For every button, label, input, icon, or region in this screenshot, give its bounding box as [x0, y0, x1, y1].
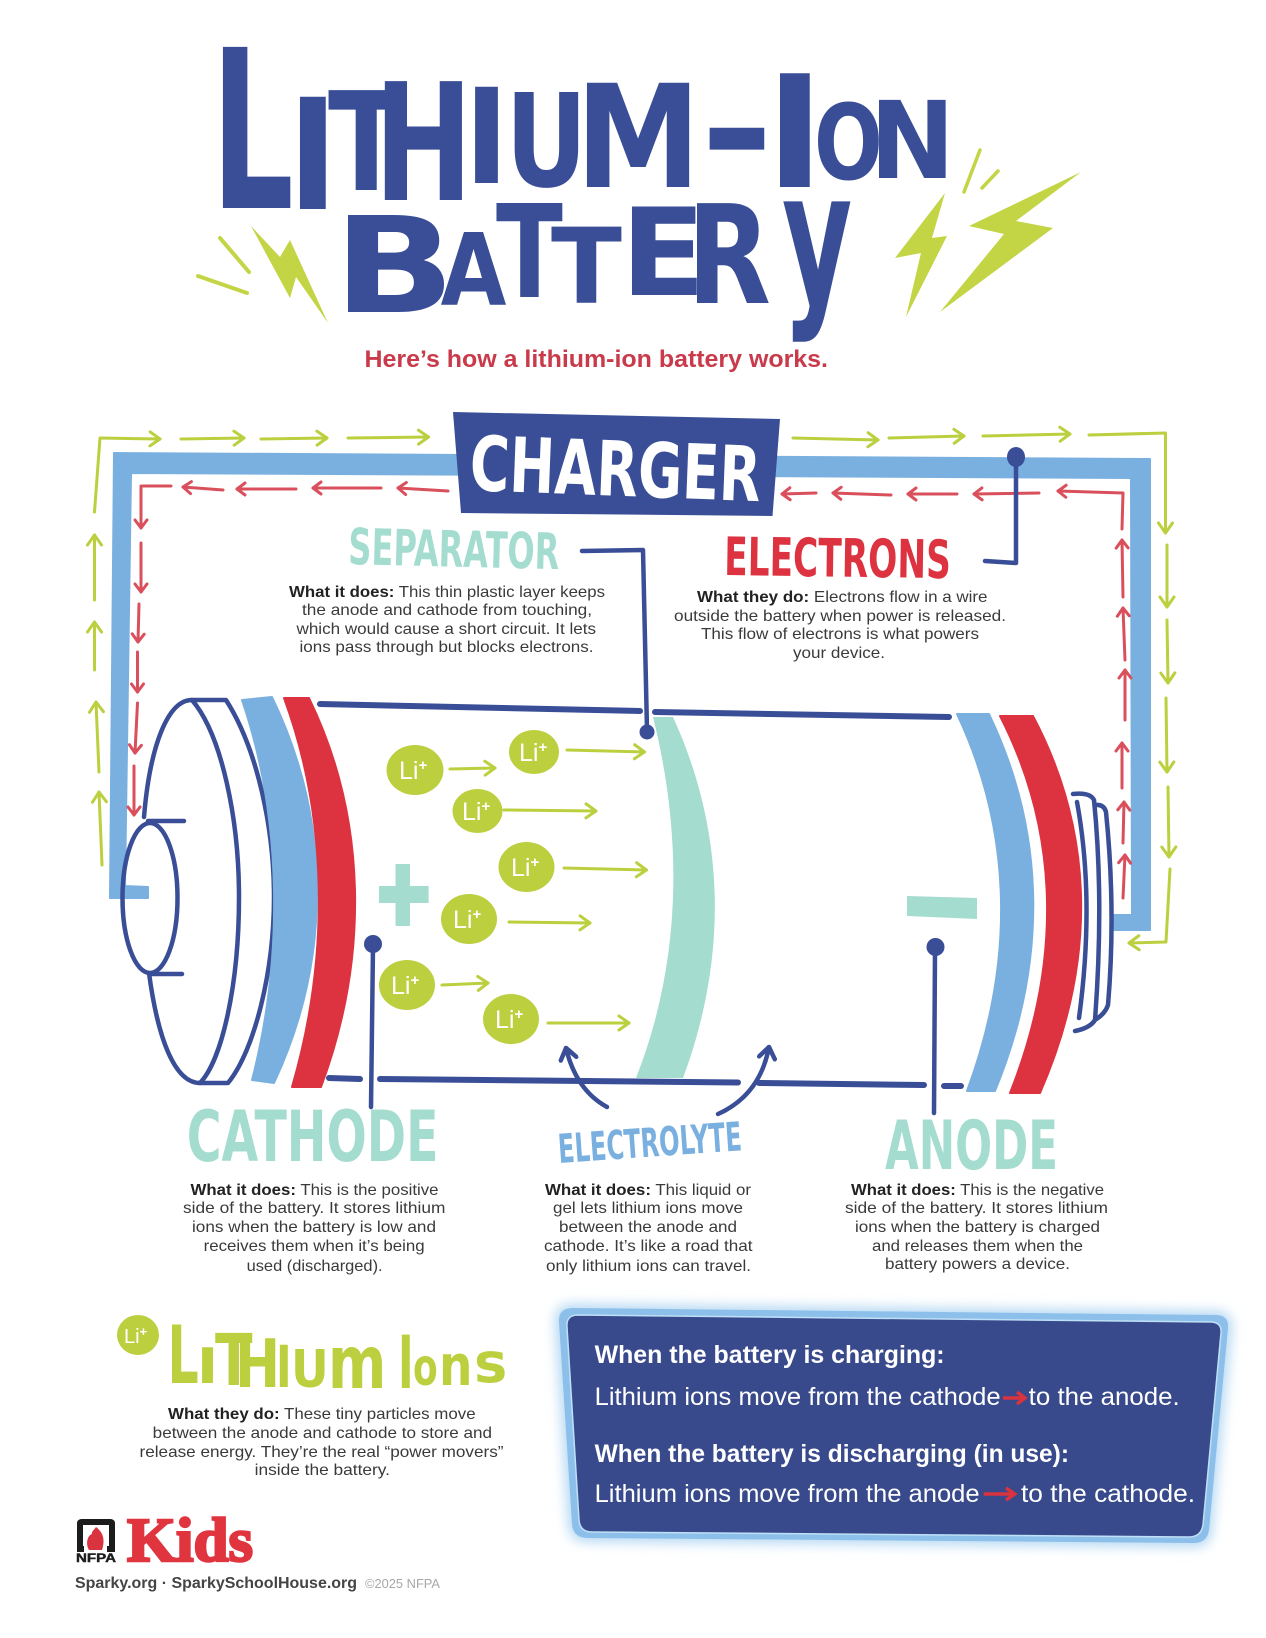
lithium ions: Li — [462, 798, 481, 826]
battery casing lines — [320, 704, 961, 1086]
text: separator: ions pass through but blocks electrons. — [300, 639, 594, 656]
lithium ions: Li — [511, 854, 530, 882]
right blue layer — [957, 714, 1033, 1091]
discharging text: Lithium ions move from the anode — [595, 1480, 980, 1508]
text: cathode: used (discharged). — [247, 1258, 383, 1275]
positive end cap — [122, 700, 274, 1083]
charger box — [453, 412, 780, 519]
heading: lithium ions — [117, 1308, 507, 1406]
text: cathode — [183, 1182, 445, 1275]
text: electrons — [674, 589, 1006, 662]
text: separator: What it does: This thin plastic layer keeps — [289, 584, 605, 601]
lithium ions — [379, 730, 559, 1044]
text: anode: and releases them when the — [872, 1238, 1083, 1255]
heading: lithium ions: + — [140, 1324, 148, 1339]
charging text — [595, 1383, 1180, 1411]
text: lithium ions: release energy. They’re the real “power movers” — [140, 1444, 504, 1461]
charging text: to the anode. — [1029, 1383, 1180, 1411]
text: electrolyte: cathode. It’s like a road that — [544, 1238, 753, 1255]
title: M — [575, 54, 701, 221]
heading: lithium ions: s — [474, 1331, 507, 1396]
logo: NFPA — [76, 1522, 116, 1565]
subtitle: Here’s how a lithium-ion battery works. — [364, 346, 828, 373]
text: cathode: receives them when it’s being — [204, 1238, 425, 1255]
text: anode: What it does: This is the negative — [851, 1182, 1104, 1199]
text: cathode: What it does: This is the positive — [190, 1182, 439, 1199]
panel glow — [555, 1304, 1232, 1547]
heading: lithium ions: I — [276, 1333, 292, 1401]
lithium ions: + — [514, 1006, 523, 1023]
logo: Kids: Kids — [127, 1507, 253, 1575]
right red layer — [1000, 716, 1081, 1093]
heading: electrolyte: ELECTROLYTE — [556, 1114, 743, 1173]
title: O — [814, 82, 883, 204]
text: electrolyte: gel lets lithium ions move — [553, 1200, 743, 1217]
lithium ions: Li — [495, 1006, 514, 1034]
logo: NFPA: NFPA — [76, 1553, 116, 1565]
lithium ions: + — [472, 906, 481, 923]
icon: lightning bolt left — [198, 226, 328, 323]
heading: lithium ions: Li — [124, 1326, 140, 1348]
electrons pointer wire — [985, 447, 1025, 563]
inner red electron arrows — [134, 486, 1125, 898]
heading: lithium ions: I — [398, 1322, 414, 1406]
ion arrows — [442, 750, 646, 1023]
title: I — [464, 60, 509, 214]
title: T — [496, 179, 563, 329]
text: electrons: What they do: Electrons flow in a wire — [697, 589, 988, 606]
title: H — [374, 49, 473, 239]
heading: lithium ions: L — [168, 1308, 199, 1402]
heading: lithium ions: U — [291, 1339, 329, 1400]
text: anode: battery powers a device. — [885, 1256, 1070, 1273]
lithium ions: + — [538, 739, 547, 756]
heading: separator: SEPARATOR — [348, 518, 560, 581]
electrolyte arrows — [566, 1047, 769, 1114]
heading: lithium ions: H — [235, 1326, 280, 1404]
lithium ions: Li — [399, 757, 418, 785]
heading: electrons: ELECTRONS — [724, 527, 951, 591]
lithium ions: + — [418, 757, 427, 774]
text: electrolyte: What it does: This liquid or — [545, 1182, 752, 1199]
text: cathode: ions when the battery is low and — [192, 1219, 436, 1236]
text: lithium ions: inside the battery. — [255, 1462, 390, 1479]
title: T — [328, 63, 404, 223]
charger box: CHARGER — [468, 419, 763, 519]
lithium ions: + — [410, 972, 419, 989]
minus sign — [907, 896, 977, 919]
title: N — [870, 79, 955, 204]
title: U — [505, 67, 587, 217]
text: electrolyte: between the anode and — [559, 1219, 737, 1236]
text: lithium ions: between the anode and cathode to store and — [153, 1425, 492, 1442]
heading: lithium ions: I — [197, 1337, 218, 1395]
heading: lithium ions: T — [215, 1319, 253, 1402]
lithium ions: + — [530, 854, 539, 871]
text: lithium ions — [140, 1406, 504, 1479]
discharging text: to the cathode. — [1021, 1480, 1195, 1508]
text: anode: ions when the battery is charged — [855, 1219, 1100, 1236]
text: electrons: This flow of electrons is what powers — [701, 626, 979, 643]
left blue layer — [242, 697, 317, 1083]
heading: anode: ANODE — [885, 1107, 1058, 1186]
lithium ions: Li — [519, 739, 538, 767]
title: E — [620, 184, 706, 325]
title: I — [287, 67, 338, 246]
footer links: Sparky.org · SparkySchoolHouse.org — [75, 1575, 357, 1592]
cathode pointer — [364, 935, 382, 1107]
lithium ions: + — [481, 798, 490, 815]
anode pointer — [926, 938, 944, 1113]
text: electrons: outside the battery when power is released. — [674, 608, 1006, 625]
title: B — [333, 188, 455, 344]
circuit wire frame — [110, 453, 1150, 930]
text: separator — [289, 584, 605, 656]
separator layer — [636, 717, 715, 1078]
title: I — [766, 43, 824, 225]
text: electrolyte — [544, 1182, 753, 1275]
separator pointer — [582, 550, 654, 740]
negative end cap — [1073, 794, 1112, 1031]
icon: lightning bolts right — [895, 150, 1081, 317]
title: A — [441, 212, 507, 329]
text: electrons: your device. — [793, 645, 885, 662]
title: y — [782, 131, 852, 346]
left red layer — [284, 698, 355, 1087]
discharging heading: When the battery is discharging (in use): — [595, 1440, 1069, 1468]
discharging text — [595, 1480, 1195, 1508]
heading: lithium ions: o — [413, 1336, 438, 1398]
text: lithium ions: What they do: These tiny particles move — [168, 1406, 476, 1423]
panel: charging and discharging summary — [555, 1304, 1232, 1547]
heading: lithium ions: m — [328, 1322, 386, 1406]
text: separator: which would cause a short circuit. It lets — [295, 621, 596, 638]
charging heading: When the battery is charging: — [595, 1341, 945, 1369]
lithium ions: Li — [453, 906, 472, 934]
outer green current arrows — [94, 433, 1170, 943]
panel border — [559, 1308, 1228, 1543]
charging text: Lithium ions move from the cathode — [595, 1383, 1001, 1411]
title: - — [700, 41, 774, 220]
copyright: ©2025 NFPA — [365, 1577, 441, 1591]
heading: cathode: CATHODE — [187, 1096, 438, 1178]
title: R — [687, 177, 771, 336]
battery body — [122, 697, 1112, 1093]
text: separator: the anode and cathode from touching, — [302, 602, 592, 619]
text: anode — [845, 1182, 1108, 1273]
title — [211, 3, 955, 346]
title: T — [551, 206, 622, 328]
plus sign — [379, 864, 429, 926]
lithium ions: Li — [391, 972, 410, 1000]
title: L — [211, 3, 294, 260]
text: anode: side of the battery. It stores lithium — [845, 1200, 1108, 1217]
text: cathode: side of the battery. It stores lithium — [183, 1200, 445, 1217]
text: electrolyte: only lithium ions can travel. — [546, 1258, 751, 1275]
heading: lithium ions: n — [439, 1334, 472, 1399]
panel box — [567, 1315, 1221, 1537]
